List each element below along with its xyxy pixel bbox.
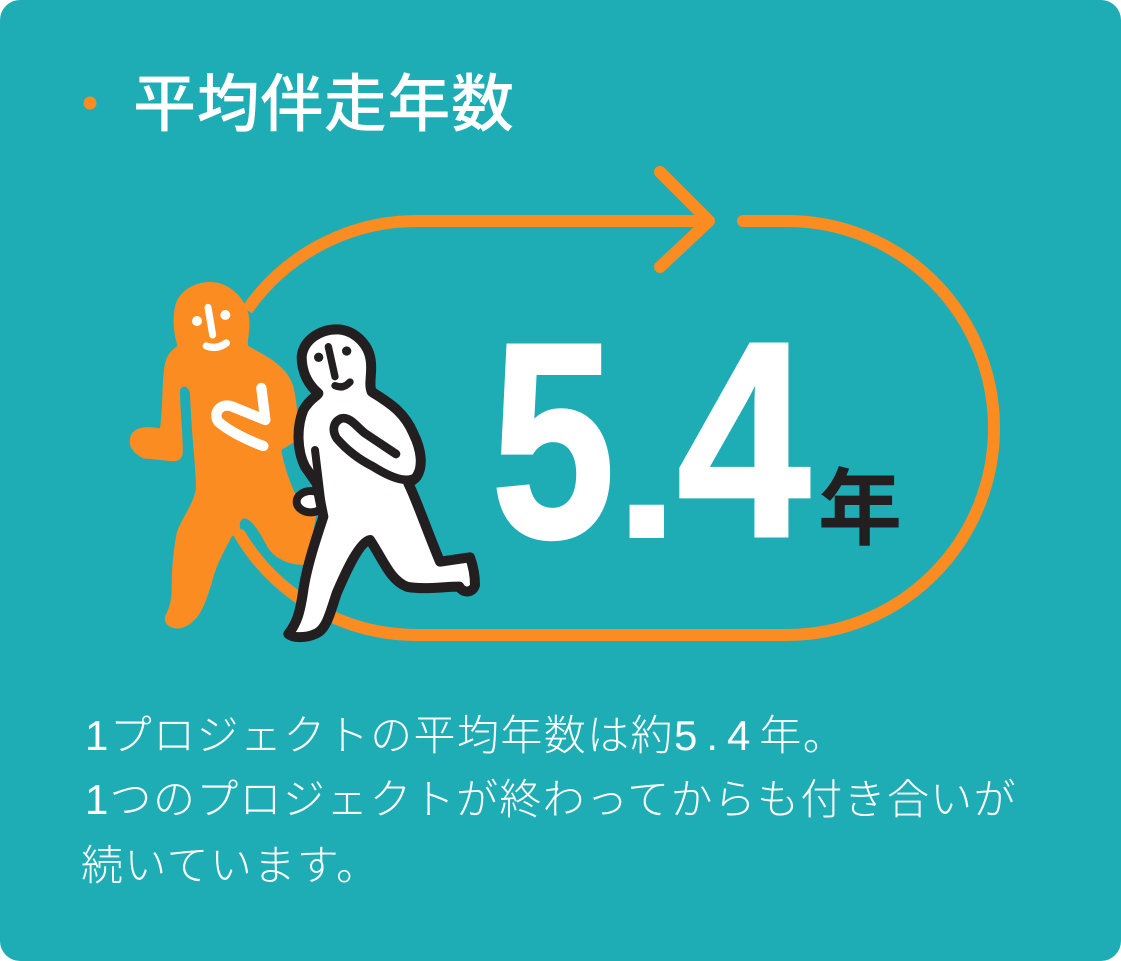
icon: white running figure (288, 329, 475, 637)
icon: orange running figure (130, 282, 317, 628)
big number: 4 (677, 284, 812, 596)
heading: 平均伴走年数 (133, 54, 515, 145)
icon: heading bullet (84, 96, 96, 110)
line 2: 1つのプロジェクトが終わってからも付き合いが (85, 776, 1017, 823)
unit: 年 (818, 442, 902, 563)
big number (491, 284, 812, 597)
big number: . (613, 336, 681, 586)
body text (81, 712, 1017, 889)
line 1: 1プロジェクトの平均年数は約5.4年。 (85, 712, 846, 759)
big number: 5 (491, 284, 615, 597)
arrow: looping track (240, 172, 994, 635)
line 3: 続いています。 (81, 842, 379, 889)
